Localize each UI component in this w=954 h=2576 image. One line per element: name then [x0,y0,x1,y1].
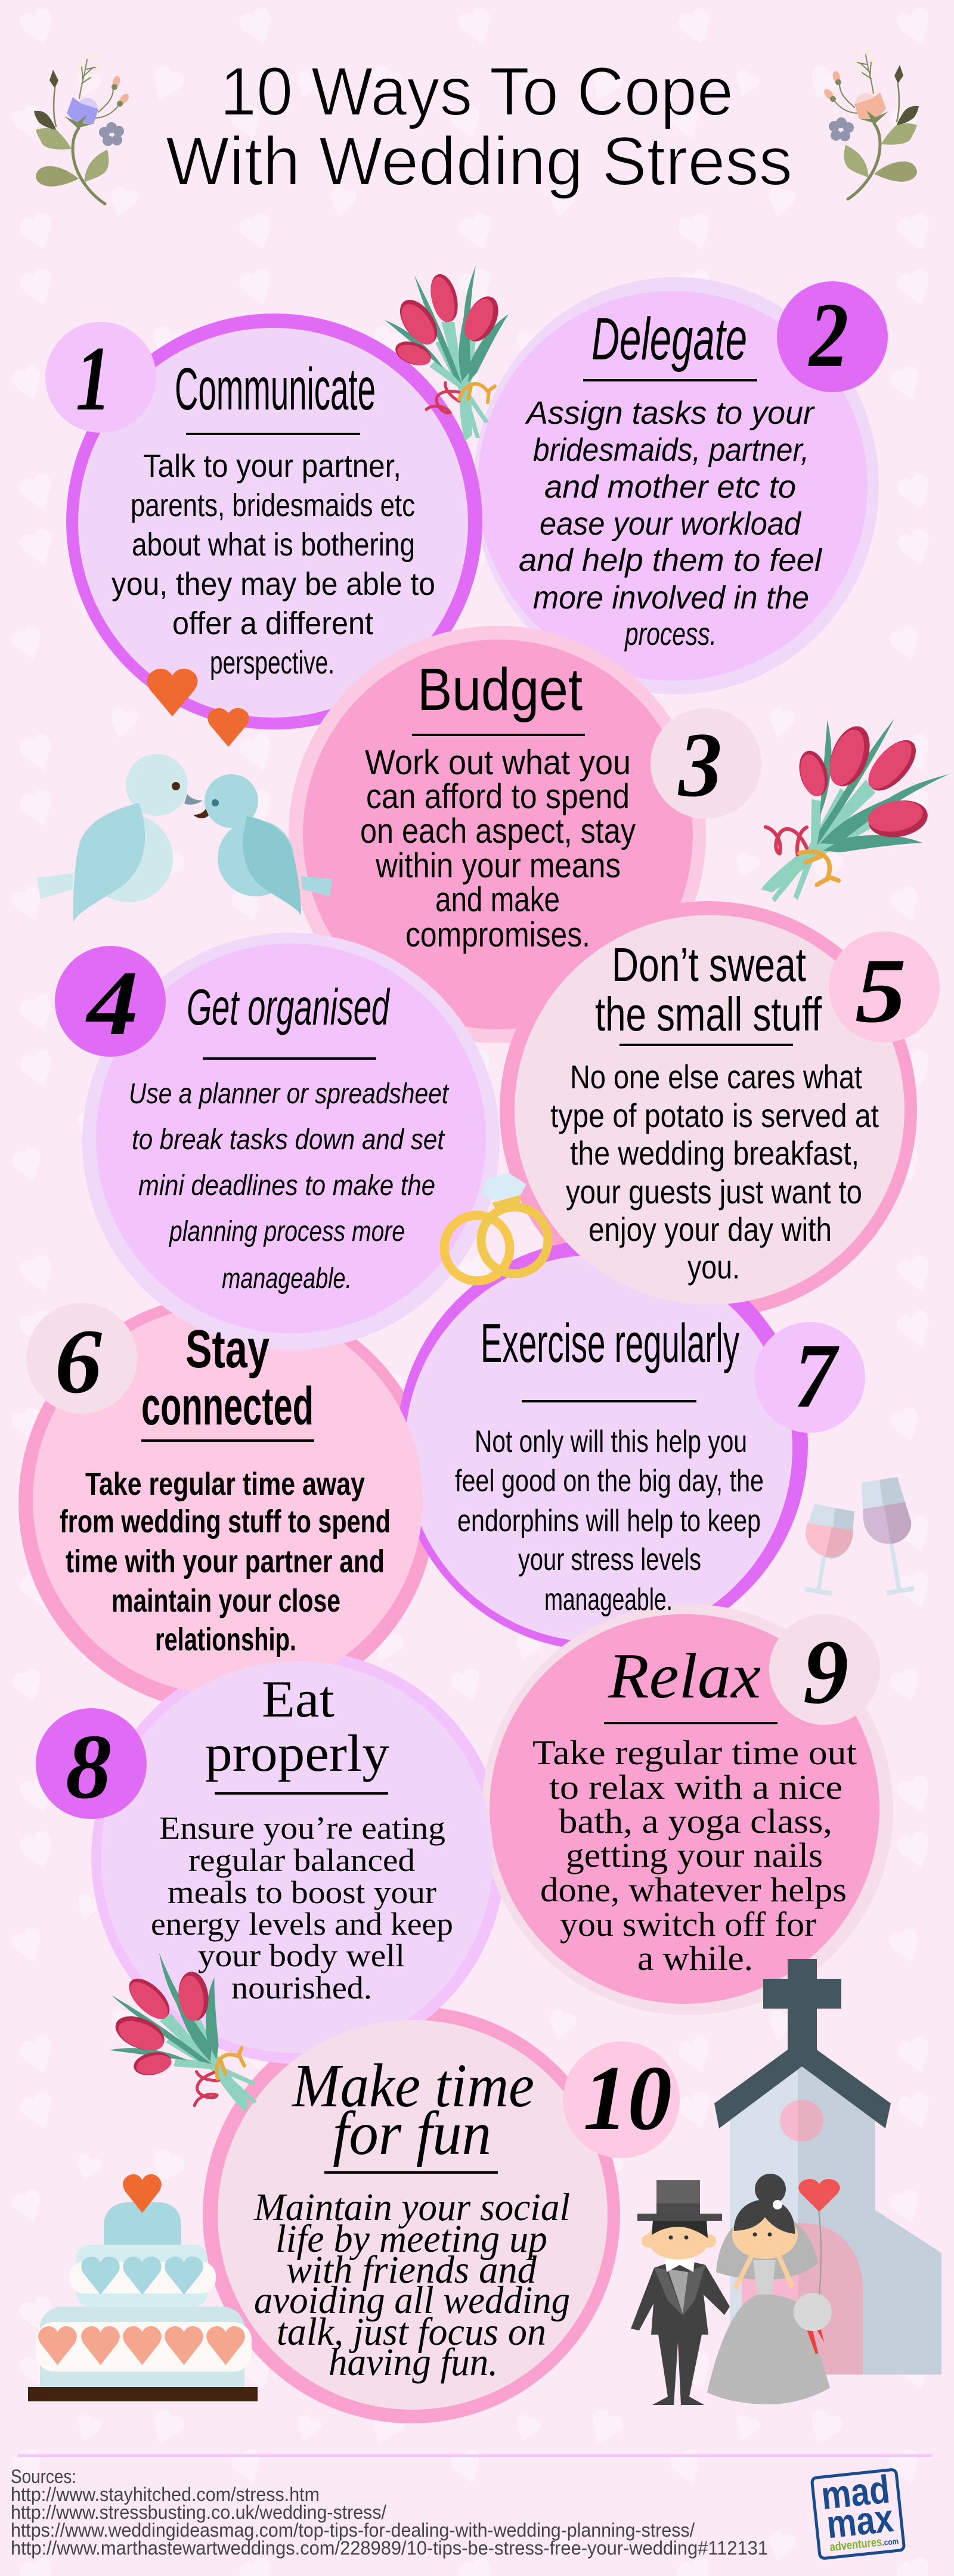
icon: orange hearts [147,669,249,747]
sources text block [11,2466,768,2559]
body text: Ensure you’re eating [159,1810,445,1846]
panel 4: Get organised [55,933,500,1350]
heading: Relax: Relax [608,1641,761,1712]
icon: groom [631,2180,730,2405]
body text [455,1424,764,1617]
sources text block: http://www.stayhitched.com/stress.htm [11,2484,320,2505]
body text: your guests just want to [566,1173,862,1211]
body text: feel good on the big day, the [455,1464,764,1498]
logo: mad max adventures: adventures [829,2535,882,2554]
icon: bride [707,2174,840,2404]
icon: tulip bouquet lower [79,1935,284,2156]
heading: Make time for fun: Make time [291,2052,534,2120]
panel 9: Relax [482,1604,893,2015]
number badge 4 [55,946,166,1057]
body text: within your means [375,846,621,885]
heading: Delegate: Delegate [591,306,747,373]
panel 10: Make time for fun [203,2006,680,2423]
number badge 7 [754,1322,865,1433]
heading: Stay connected: Stay [185,1320,270,1379]
logo: mad max adventures: max [825,2496,896,2546]
body text: more involved in the [533,580,809,616]
body text: offer a different [172,606,373,641]
heading: Eat properly: Eat [262,1671,334,1728]
body text [111,448,435,681]
heading: Make time for fun [291,2052,534,2174]
body text: mini deadlines to make the [138,1170,435,1202]
icon: wedding rings [444,1173,548,1281]
body text: Not only will this help you [475,1424,747,1459]
number badge 2 [777,281,888,392]
body text: parents, bridesmaids etc [131,488,415,523]
number badge 5 [829,932,940,1042]
panel 3: Budget [289,626,761,1043]
body text: the wedding breakfast, [570,1134,859,1172]
body text: getting your nails [566,1836,823,1874]
body text: time with your partner and [66,1544,385,1579]
body text: No one else cares what [570,1058,862,1095]
heading: Exercise regularly [481,1313,739,1402]
sources text block: Sources: [11,2466,76,2487]
panel 5: Don't sweat the small stuff [500,901,940,1318]
number badge 9: 9 [803,1621,848,1723]
body text [253,2186,570,2384]
number badge 1 [45,322,156,433]
panel 8: Eat properly [36,1650,505,2064]
body text: Assign tasks to your [525,395,815,431]
number badge 5: 5 [855,939,906,1042]
number badge 1: 1 [76,327,111,430]
icon: left floral sprig [34,54,131,204]
heading: Make time for fun: for fun [333,2099,491,2168]
title [166,54,792,200]
body text: from wedding stuff to spend [60,1504,391,1540]
heading: Eat properly [205,1671,389,1795]
sources text block: https://www.weddingideasmag.com/top-tips-for-dealing-with-wedding-planning-stress/ [11,2519,695,2541]
heading: Don't sweat the small stuff [595,938,822,1046]
body text [360,743,636,954]
panel 7: Exercise regularly [397,1240,865,1651]
icon: tulip bouquet right [704,681,954,934]
body text: and mother etc to [544,469,796,505]
body text: you. [687,1248,740,1286]
body text: manageable. [544,1582,673,1617]
body text [151,1810,453,2006]
heading: Budget: Budget [417,656,583,723]
number badge 8: 8 [66,1715,111,1818]
panel 6: Stay connected [18,1295,436,1712]
body text [60,1466,391,1658]
body text: and help them to feel [519,542,823,578]
number badge 6: 6 [55,1310,103,1413]
heading: Get organised: Get organised [187,979,391,1036]
icon: church [714,1959,941,2375]
heading: Eat properly: properly [205,1725,389,1783]
body text: Talk to your partner, [143,448,401,484]
panel 1: Communicate [45,314,482,730]
body text: manageable. [222,1263,352,1295]
body text: ease your workload [540,506,802,542]
number badge 2: 2 [808,284,848,386]
body text: you switch off for [560,1905,816,1944]
body text: life by meeting up [275,2217,547,2261]
heading: Don't sweat the small stuff: the small stuff [595,988,822,1041]
icon: tulip bouquet top [385,265,509,441]
body text: enjoy your day with [588,1211,832,1248]
body text: talk, just focus on [277,2310,546,2354]
heading: Exercise regularly: Exercise regularly [481,1313,739,1374]
body text: Work out what you [365,743,631,782]
body text: with friends and [286,2248,537,2292]
body text: endorphins will help to keep [457,1504,761,1538]
body text [550,1058,879,1286]
title: 10 Ways To Cope [220,54,733,130]
sources text block: http://www.stressbusting.co.uk/wedding-stress/ [11,2501,386,2523]
icon: right floral sprig [822,49,919,199]
number badge 6 [26,1303,137,1414]
logo: mad max adventures: mad [819,2466,892,2518]
body text: having fun. [329,2341,498,2384]
circle backdrops [18,277,917,2423]
icon: wedding cake [28,2174,258,2401]
logo: mad max adventures: .com [881,2536,899,2547]
heading: Stay connected [141,1320,314,1442]
body text: Take regular time away [85,1466,365,1502]
body text: about what is bothering [132,527,415,563]
body text [519,395,823,652]
body text: you, they may be able to [111,566,435,602]
body text: perspective. [210,645,334,681]
body text: process. [624,616,717,652]
heading: Communicate: Communicate [175,356,376,423]
heading: Delegate [583,306,757,381]
number badge 3: 3 [677,713,722,816]
body text: type of potato is served at [550,1097,879,1134]
number badge 8 [36,1708,147,1819]
heading: Don't sweat the small stuff: Don’t sweat [612,938,806,991]
number badge 4: 4 [85,952,138,1054]
body text: compromises. [405,915,590,954]
body text: Maintain your social [253,2186,570,2229]
number badge 9 [769,1614,880,1725]
heading: Communicate [175,356,376,435]
body text: Take regular time out [532,1733,857,1772]
heading: Stay connected: connected [141,1377,314,1436]
body text: bridesmaids, partner, [533,432,809,468]
body text: Use a planner or spreadsheet [129,1078,449,1110]
number badge 10 [563,2041,680,2158]
body text: done, whatever helps [540,1870,847,1909]
body text: to break tasks down and set [132,1124,445,1156]
heading: Get organised [187,979,391,1060]
number badge 7: 7 [794,1324,840,1427]
number badge 10: 10 [583,2047,672,2149]
icon: wine glasses [805,1477,914,1594]
body text: nourished. [231,1970,372,2006]
body text: and make [435,880,560,919]
icon: love birds [37,754,332,922]
body text [129,1078,449,1295]
body text: planning process more [168,1216,405,1247]
body text [532,1733,857,1978]
title: With Wedding Stress [166,123,792,200]
body text: a while. [637,1939,753,1978]
body text: can afford to spend [366,777,630,816]
number badge 3 [651,708,761,819]
body text: relationship. [155,1622,296,1658]
body text: energy levels and keep [151,1906,453,1942]
body text: maintain your close [111,1583,340,1619]
logo: mad max adventures [811,2466,905,2559]
body text: meals to boost your [168,1874,436,1910]
body text: your stress levels [518,1543,701,1577]
body text: your body well [198,1938,405,1973]
sources text block: http://www.marthastewartweddings.com/228989/10-tips-be-stress-free-your-wedding#112131 [11,2537,768,2559]
body text: to relax with a nice [549,1768,843,1807]
body text: avoiding all wedding [254,2279,570,2322]
panel 2: Delegate [473,277,888,694]
body text: bath, a yoga class, [559,1802,832,1841]
body text: on each aspect, stay [360,812,636,851]
body text: regular balanced [188,1842,415,1878]
